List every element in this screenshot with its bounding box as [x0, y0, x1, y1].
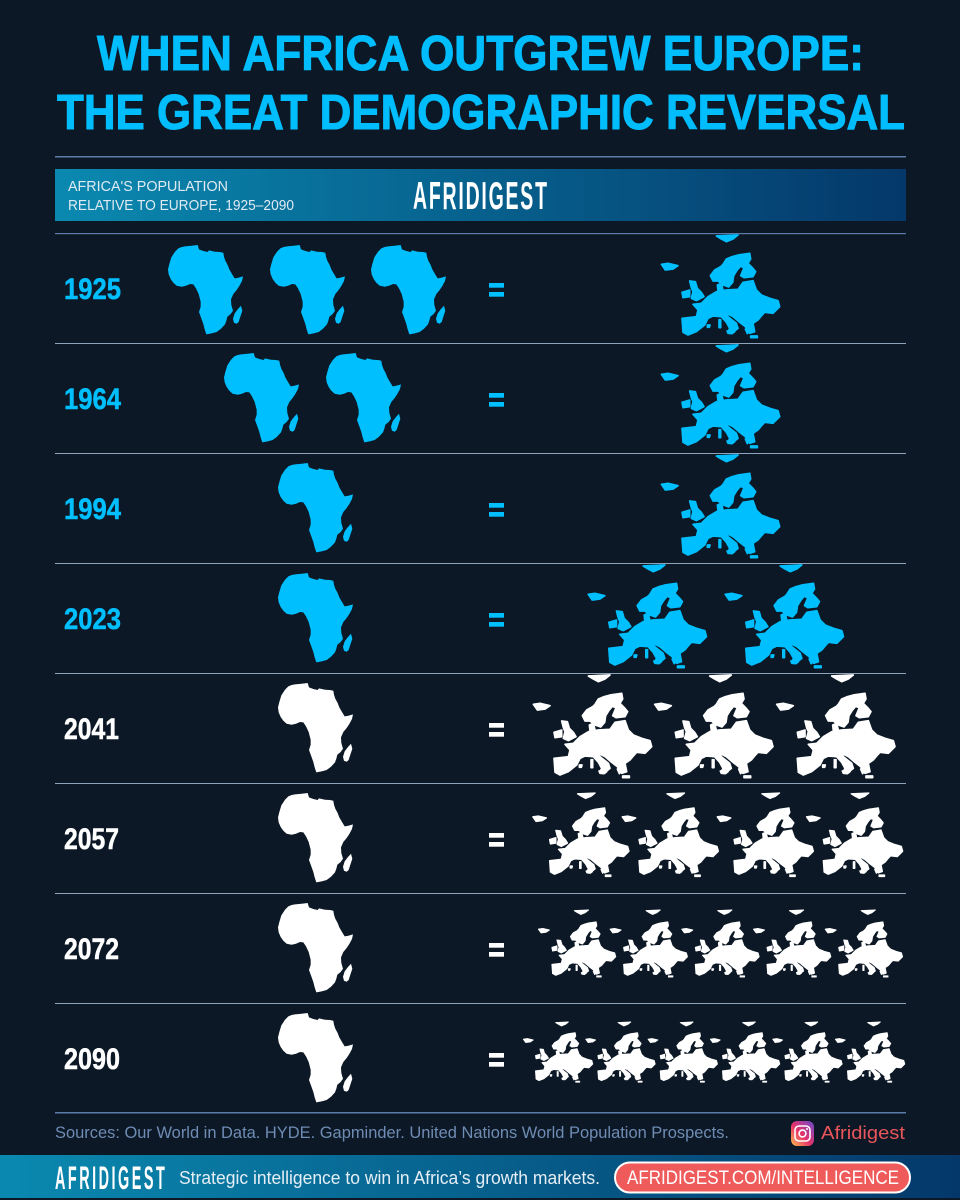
title: WHEN AFRICA OUTGREW EUROPE: [97, 27, 864, 81]
year 1994: 1994 [64, 493, 121, 526]
Africa icon: one [278, 1013, 353, 1102]
Africa icon: one [278, 573, 353, 662]
Africa icon: one [278, 903, 353, 992]
year 2023: 2023 [64, 603, 121, 636]
instagram handle: Afridigest [821, 1123, 905, 1143]
row: 1994 [64, 455, 780, 558]
year 2090: 2090 [64, 1043, 120, 1076]
equals sign [489, 283, 504, 297]
footer logo: AFRIDIGEST [55, 1162, 165, 1197]
row: 1925 [64, 235, 780, 338]
equals sign [489, 1053, 504, 1067]
row: 2023 [64, 565, 843, 668]
row: 2072 [64, 903, 903, 992]
icon: instagram [791, 1121, 814, 1146]
row: 2057 [64, 793, 903, 882]
Africa icon: one [278, 683, 353, 772]
year 2057: 2057 [64, 823, 119, 856]
Europe icons: three [533, 675, 895, 778]
banner subtitle: RELATIVE TO EUROPE, 1925–2090 [68, 198, 294, 214]
footer tagline: Strategic intelligence to win in Africa’s growth markets. [179, 1167, 600, 1188]
row: 2090 [64, 1013, 905, 1102]
Europe icon: one [661, 455, 780, 558]
equals sign [489, 613, 504, 627]
year 2072: 2072 [64, 933, 119, 966]
year 1964: 1964 [64, 383, 121, 416]
row: 2041 [64, 675, 895, 778]
row dividers [55, 233, 906, 1114]
equals sign [489, 943, 504, 957]
call to action pill [615, 1162, 910, 1192]
year 1925: 1925 [64, 273, 121, 306]
equals sign [489, 723, 504, 737]
call to action pill: AFRIDIGEST.COM/INTELLIGENCE [627, 1168, 899, 1189]
Africa icons: three [168, 245, 446, 334]
Europe icons: six [523, 1022, 905, 1082]
Europe icon: one [661, 345, 780, 448]
year 2041: 2041 [64, 713, 119, 746]
equals sign [489, 833, 504, 847]
Africa icon: one [278, 793, 353, 882]
equals sign [489, 393, 504, 407]
footer bar [0, 1155, 960, 1198]
equals sign [489, 503, 504, 517]
Europe icons: five [538, 910, 903, 977]
Africa icon: one [278, 463, 353, 552]
banner logo: AFRIDIGEST [413, 174, 547, 218]
Africa icons: two [224, 353, 401, 442]
banner subtitle: AFRICA'S POPULATION [68, 179, 228, 195]
Europe icons: two [588, 565, 843, 668]
banner subtitle [68, 179, 294, 214]
row: 1964 [64, 345, 780, 448]
Europe icon: one [661, 235, 780, 338]
Europe icons: four [533, 793, 903, 876]
header banner [55, 169, 906, 221]
sources text: Sources: Our World in Data. HYDE. Gapminder. United Nations World Population Prospects. [55, 1123, 729, 1142]
title [57, 27, 905, 140]
